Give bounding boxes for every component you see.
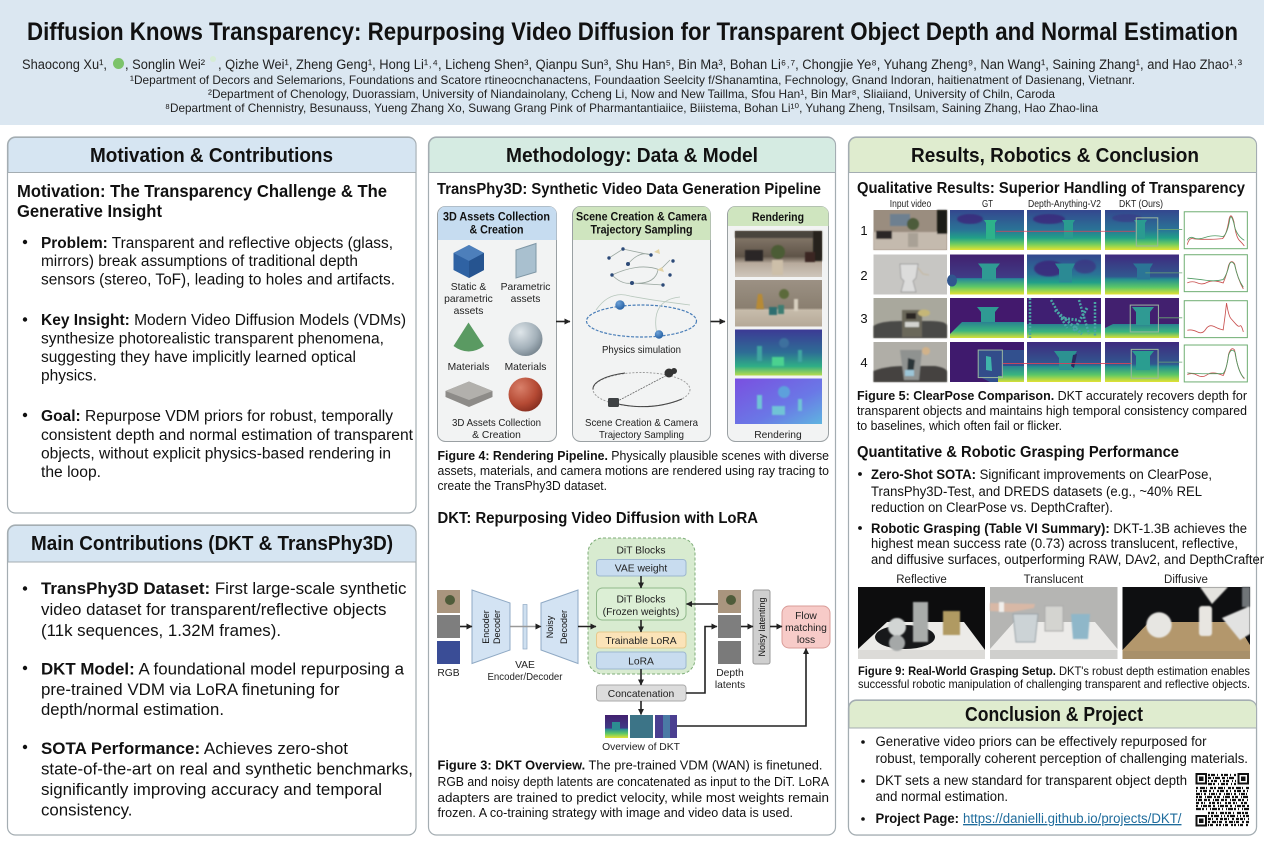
caption: figure 9: Figure 9: Real-World Grasping Setup. DKT's robust depth estimation enables: [858, 664, 1250, 678]
box: 3D assets collection: Materials: [448, 362, 489, 373]
labels: Diffusive: [1164, 574, 1208, 586]
caption: figure 5: to baselines, which often fail or flicker.: [857, 419, 1062, 433]
panel: results: [848, 137, 1264, 835]
bullet: TransPhy3D dataset: video dataset for transparent/reflective objects: [41, 601, 386, 619]
column labels: Depth-Anything-V2: [1028, 199, 1101, 210]
image: normal render: [735, 378, 822, 424]
bullet: generative priors: [861, 734, 1248, 766]
bullet: robotic grasping: [858, 521, 1264, 567]
caption: figure 5: Figure 5: ClearPose Comparison. DKT accurately recovers depth for: [857, 389, 1247, 403]
heading: methodology: Methodology: Data & Model: [506, 145, 758, 167]
box: 3D assets collection: assets: [511, 294, 540, 305]
caption: figure 3: Figure 3: DKT Overview. The pre-trained VDM (WAN) is finetuned.: [438, 758, 822, 772]
bullet: SOTA performance: SOTA Performance: Achieves zero-shot: [41, 740, 348, 758]
caption: figure 5: transparent objects and maintains high temporal consistency compared: [857, 404, 1247, 418]
QR code: [1196, 774, 1249, 826]
encoder block: Encoder: [481, 610, 491, 644]
bullet: project page: [861, 811, 1182, 826]
bullet: new standard: and normal estimation.: [876, 789, 1008, 804]
latent bar: [523, 604, 527, 649]
bullet: new standard: DKT sets a new standard for transparent object depth: [876, 773, 1187, 788]
icon: camera trajectory: [593, 368, 690, 407]
icon: parametric panel: [516, 244, 536, 278]
bullet: new standard: [861, 773, 1187, 804]
caption: figure 4: [438, 449, 829, 493]
group: DiT blocks: [588, 538, 695, 674]
column labels: [890, 199, 1163, 210]
arrow: assets to scene: [556, 320, 570, 322]
subheading: TransPhy3D pipeline: TransPhy3D: Synthetic Video Data Generation Pipeline: [437, 181, 821, 198]
box: scene creation: Trajectory Sampling: [590, 222, 692, 236]
bullet: DKT model: DKT Model: A foundational model repurposing a: [41, 660, 405, 678]
caption: figure 3: frozen. A co-training strategy with image and video data is used.: [438, 806, 793, 820]
bullet: problem: sensors (stereo, ToF), leading to holes and artifacts.: [41, 272, 395, 288]
caption: figure 3: RGB and noisy depth latents are concatenated as input to the DiT. LoRA: [438, 775, 830, 789]
bullet: TransPhy3D dataset: [23, 580, 407, 640]
subheading: DKT: DKT: Repurposing Video Diffusion with LoRA: [438, 510, 758, 527]
bullet: SOTA performance: [23, 740, 413, 820]
caption: figure 3: adapters are trained to predict velocity, while most weights remain: [438, 791, 829, 805]
column labels: GT: [982, 199, 994, 210]
image strip: DKT outputs: Overview of DKT: [602, 742, 681, 753]
box: scene creation: Scene Creation & Camera: [576, 210, 707, 224]
box: 3D assets collection: 3D Assets Collection: [452, 418, 541, 429]
bullet: zero-shot SOTA: reduction on ClearPose vs. DepthCrafter).: [871, 500, 1113, 515]
image strip: DKT outputs: [602, 715, 681, 753]
caption: figure 4: assets, materials, and camera motions are rendered using ray tracing to: [438, 464, 829, 478]
authors: Shaocong Xu¹,: [22, 57, 107, 72]
box: noisy latents: Noisy latenting: [757, 597, 767, 657]
icon: physics orbit: [586, 295, 696, 339]
bullet: DKT model: depth/normal estimation.: [41, 701, 224, 719]
bullet: generative priors: robust, temporally coherent perception of challenging materials.: [876, 751, 1248, 766]
row numbers: 3: [860, 311, 868, 326]
encoder block: Decoder: [492, 610, 502, 644]
authors: , Qizhe Wei¹, Zheng Geng¹, Hong Li¹˒⁴, Licheng Shen³, Qianpu Sun³, Shu Han⁵, Bin Ma³, Bohan Li⁶˒⁷, Chongjie Ye⁸, Yuhang Zheng⁹, Nan Wang¹, Saining Zhang¹, and Hao Zhao¹˒³: [218, 57, 1242, 72]
box: scene creation: Scene Creation & Camera: [585, 418, 698, 429]
image stack: depth latents: Depth: [716, 668, 744, 679]
bullet: zero-shot SOTA: Zero-Shot SOTA: Significant improvements on ClearPose,: [871, 467, 1212, 482]
group: DiT blocks: DiT Blocks: [616, 546, 666, 556]
depth maps: row 2: [947, 254, 1179, 294]
row numbers: 2: [860, 268, 868, 283]
icon: flat slab: [446, 382, 492, 407]
bullet: key insight: [23, 312, 406, 384]
bullet: project page: Project Page:: [876, 811, 959, 826]
bullet: SOTA performance: state-of-the-art on real and synthetic benchmarks,: [41, 760, 413, 778]
photo: diffusive: [1122, 587, 1250, 659]
labels: Translucent: [1024, 574, 1084, 586]
arrow: scene to rendering: [710, 320, 725, 322]
caption: figure 4: Figure 4: Rendering Pipeline. Physically plausible scenes with diverse: [438, 449, 829, 463]
figure 9: grasping photos: [858, 574, 1250, 659]
group: DiT blocks: VAE weight: [615, 564, 667, 574]
icon: green cone: [454, 322, 484, 352]
box: scene creation: Physics simulation: [602, 345, 681, 356]
noisy decoder block: Noisy: [545, 615, 555, 638]
box: 3D assets collection: Static &: [451, 282, 486, 293]
box: rendering: [728, 206, 828, 442]
arrows: data flow: [460, 576, 806, 726]
bullet: key insight: suggesting they have implicitly learned optical: [41, 349, 356, 366]
heading: results: Results, Robotics & Conclusion: [911, 145, 1199, 167]
image stack: depth latents: [715, 590, 745, 691]
column labels: Input video: [890, 199, 931, 210]
image stack: RGB input: [437, 590, 460, 679]
bullet: goal: Goal: Repurpose VDM priors for robust, temporally: [41, 408, 393, 425]
rendering pipeline diagram: [438, 206, 828, 442]
box: 3D assets collection: [438, 206, 556, 442]
bullet: goal: consistent depth and normal estimation of transparent: [41, 427, 414, 444]
column labels: DKT (Ours): [1119, 199, 1163, 210]
box: flow matching loss: [782, 606, 830, 648]
panel: conclusion and project: [848, 700, 1256, 835]
box: scene creation: [572, 206, 710, 442]
box: rendering: Rendering: [752, 210, 804, 224]
bullet: zero-shot SOTA: TransPhy3D-Test, and DREDS datasets (e.g., ~40% REL: [871, 484, 1202, 499]
bullet: goal: [23, 408, 414, 481]
box: 3D assets collection: Materials: [505, 362, 546, 373]
label: VAE: [488, 660, 563, 683]
subheading: transparency challenge: Motivation: The Transparency Challenge & The: [17, 181, 387, 201]
subheading: quantitative: Quantitative & Robotic Grasping Performance: [857, 444, 1179, 461]
photo: reflective: [858, 587, 985, 659]
box: 3D assets collection: & Creation: [470, 222, 524, 236]
label: VAE: Encoder/Decoder: [488, 672, 563, 683]
bullet: TransPhy3D dataset: TransPhy3D Dataset: First large-scale synthetic: [41, 580, 406, 598]
heading: conclusion: Conclusion & Project: [965, 704, 1143, 726]
box: scene creation: Trajectory Sampling: [599, 430, 684, 441]
highlight boxes and profile plots: [978, 212, 1247, 382]
caption: figure 9: [858, 664, 1250, 691]
input images: [874, 210, 947, 382]
bullet: zero-shot SOTA: [858, 467, 1212, 515]
bullet: project page: https://danielli.github.io/projects/DKT/: [963, 811, 1182, 826]
box: flow matching loss: matching: [785, 623, 827, 634]
encoder block: [472, 590, 510, 664]
image: tabletop render: [735, 280, 822, 326]
group: DiT blocks: (Frozen weights): [603, 607, 679, 618]
bullet: SOTA performance: significantly improving accuracy and temporal: [41, 781, 382, 799]
row numbers: 4: [860, 355, 868, 370]
caption: figure 4: create the TransPhy3D dataset.: [438, 479, 607, 493]
affiliations: ²Department of Chenology, Duorassiam, University of Niandainolany, Ccheng Li, Now and New Taillma, Sfou Han¹, Bin Mar⁸, Sliaiiand, University of Chiln, Caroda: [208, 87, 1055, 101]
bullet: key insight: physics.: [41, 368, 97, 384]
bullet: key insight: synthesize photorealistic transparent phenomena,: [41, 330, 384, 348]
DKT architecture diagram: [437, 538, 830, 753]
bullet: goal: the loop.: [41, 464, 101, 481]
image: depth render: [735, 330, 822, 376]
box: flow matching loss: loss: [797, 635, 815, 646]
depth maps: row 3: [950, 298, 1179, 338]
bullet: DKT model: [23, 660, 405, 719]
image: living room render: [735, 231, 822, 277]
labels: [896, 574, 1208, 586]
box: 3D assets collection: assets: [454, 306, 483, 317]
figure 5: comparison grid: [860, 199, 1247, 382]
noisy decoder block: [541, 590, 578, 664]
panel: methodology: [428, 137, 836, 835]
box: concatenation: Concatenation: [608, 689, 674, 700]
icon: blue cube: [454, 245, 484, 278]
bullet: SOTA performance: consistency.: [41, 802, 132, 820]
bullet: generative priors: Generative video priors can be effectively repurposed for: [876, 734, 1207, 749]
header band: [0, 0, 1264, 125]
bullet: problem: mirrors) break assumptions of traditional depth: [41, 253, 358, 270]
box: 3D assets collection: & Creation: [472, 430, 521, 441]
noisy decoder block: Decoder: [559, 610, 569, 644]
bullet: key insight: Key Insight: Modern Video Diffusion Models (VDMs): [41, 312, 406, 329]
depth maps: row 4: [950, 342, 1179, 382]
image stack: RGB input: RGB: [437, 668, 460, 679]
heading: main contributions: Main Contributions (DKT & TransPhy3D): [31, 533, 393, 555]
labels: Reflective: [896, 574, 947, 586]
affiliations: ⁸Department of Chennistry, Besunauss, Yueng Zhang Xo, Suwang Grang Pink of Pharmantantiaiice, Biiistema, Bohan Li¹⁰, Yuhang Zheng, Tnsilsam, Saining Zhang, Hao Zhao-lina: [165, 101, 1098, 115]
box: 3D assets collection: parametric: [444, 294, 493, 305]
affiliations: [130, 73, 1135, 115]
row numbers: [860, 223, 868, 370]
panel: motivation and contributions: [8, 137, 416, 513]
box: flow matching loss: Flow: [795, 611, 817, 622]
bullet: problem: [23, 235, 395, 288]
heading: motivation and contributions: Motivation & Contributions: [90, 145, 333, 167]
bullet: robotic grasping: Robotic Grasping (Table VI Summary): DKT-1.3B achieves the: [871, 521, 1247, 536]
subheading: transparency challenge: [17, 181, 387, 221]
bullet: problem: Problem: Transparent and reflective objects (glass,: [41, 235, 393, 252]
depth maps: row 1: [950, 210, 1179, 250]
group: DiT blocks: LoRA: [628, 656, 654, 668]
bullet: robotic grasping: highest mean success rate (0.73) across translucent, reflective,: [871, 536, 1238, 551]
icon: grey sphere: [508, 322, 542, 356]
affiliations: ¹Department of Decors and Selemarions, Foundations and Scatore rtineocnchanactens, Foundaation Seelcity f/Shanamtina, Fechnology, Gnand Indoran, haitienatment of Dasienang, Vietnanr.: [130, 73, 1135, 87]
authors: , Songlin Wei²: [125, 57, 205, 72]
box: rendering: Rendering: [754, 430, 802, 441]
photo: translucent: [990, 587, 1118, 659]
image stack: depth latents: latents: [715, 680, 745, 691]
box: 3D assets collection: Parametric: [501, 282, 550, 293]
bullet: TransPhy3D dataset: (11k sequences, 1.32M frames).: [41, 622, 281, 640]
box: 3D assets collection: 3D Assets Collection: [443, 210, 550, 224]
group: DiT blocks: Trainable LoRA: [605, 636, 677, 647]
bullet: DKT model: pre-trained VDM via LoRA finetuning for: [41, 681, 340, 699]
subheading: transparency challenge: Generative Insight: [17, 201, 162, 221]
box: concatenation: [596, 685, 686, 701]
box: noisy latents: [753, 590, 770, 664]
panel: main contributions: [8, 525, 416, 835]
row numbers: 1: [860, 223, 868, 238]
bullet: goal: objects, without explicit physics-based rendering in: [41, 446, 391, 462]
icon: red sphere: [508, 378, 542, 412]
caption: figure 5: [857, 389, 1247, 433]
caption: figure 3: [438, 758, 830, 820]
icon: scene graph: [607, 247, 675, 287]
label: VAE: VAE: [515, 660, 535, 671]
group: DiT blocks: DiT Blocks: [616, 594, 666, 606]
